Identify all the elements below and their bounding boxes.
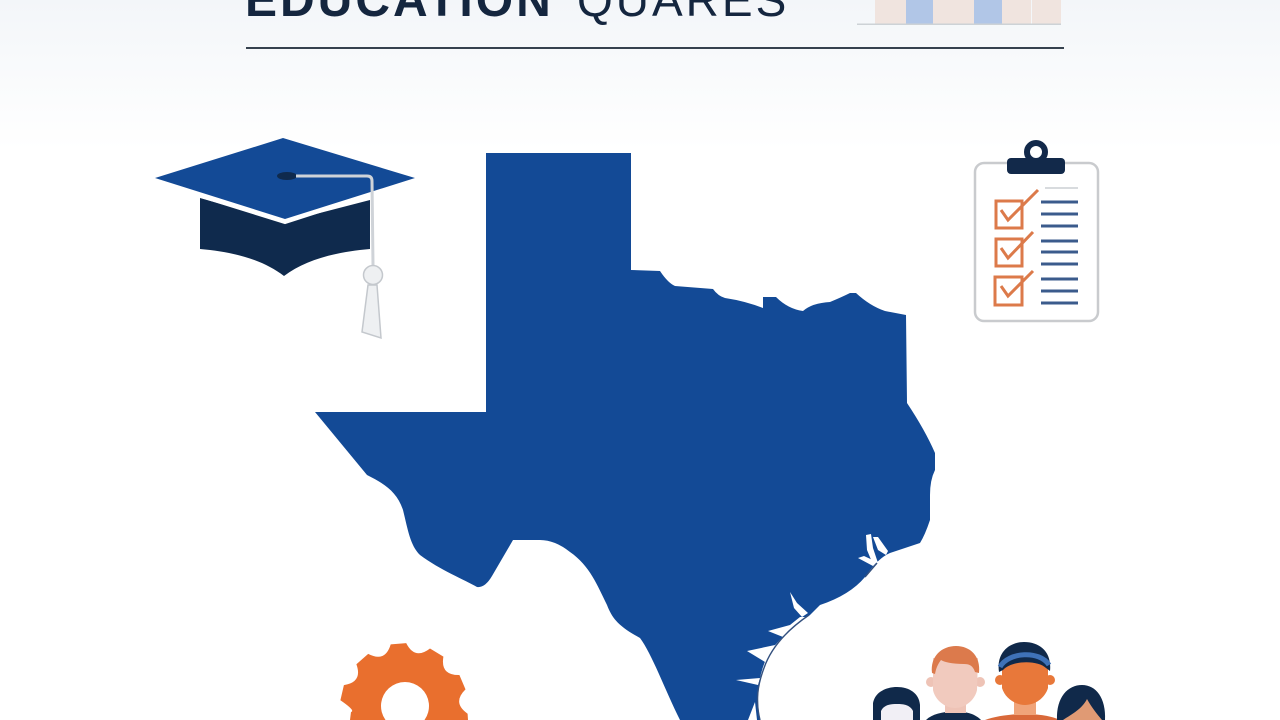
icon: clipboard checklist — [975, 143, 1098, 321]
icon: graduation cap — [155, 138, 415, 338]
person: right — [1057, 685, 1105, 720]
icon: gear — [340, 643, 468, 720]
person: orange hair — [926, 646, 985, 720]
person: blue headband — [985, 642, 1060, 720]
coast: bays and barrier islands — [736, 534, 888, 720]
title — [245, 0, 789, 27]
icon: group of people — [873, 642, 1105, 720]
map: Texas — [315, 153, 935, 720]
bar chart: header decoration — [857, 0, 1061, 25]
person: left — [873, 687, 920, 720]
